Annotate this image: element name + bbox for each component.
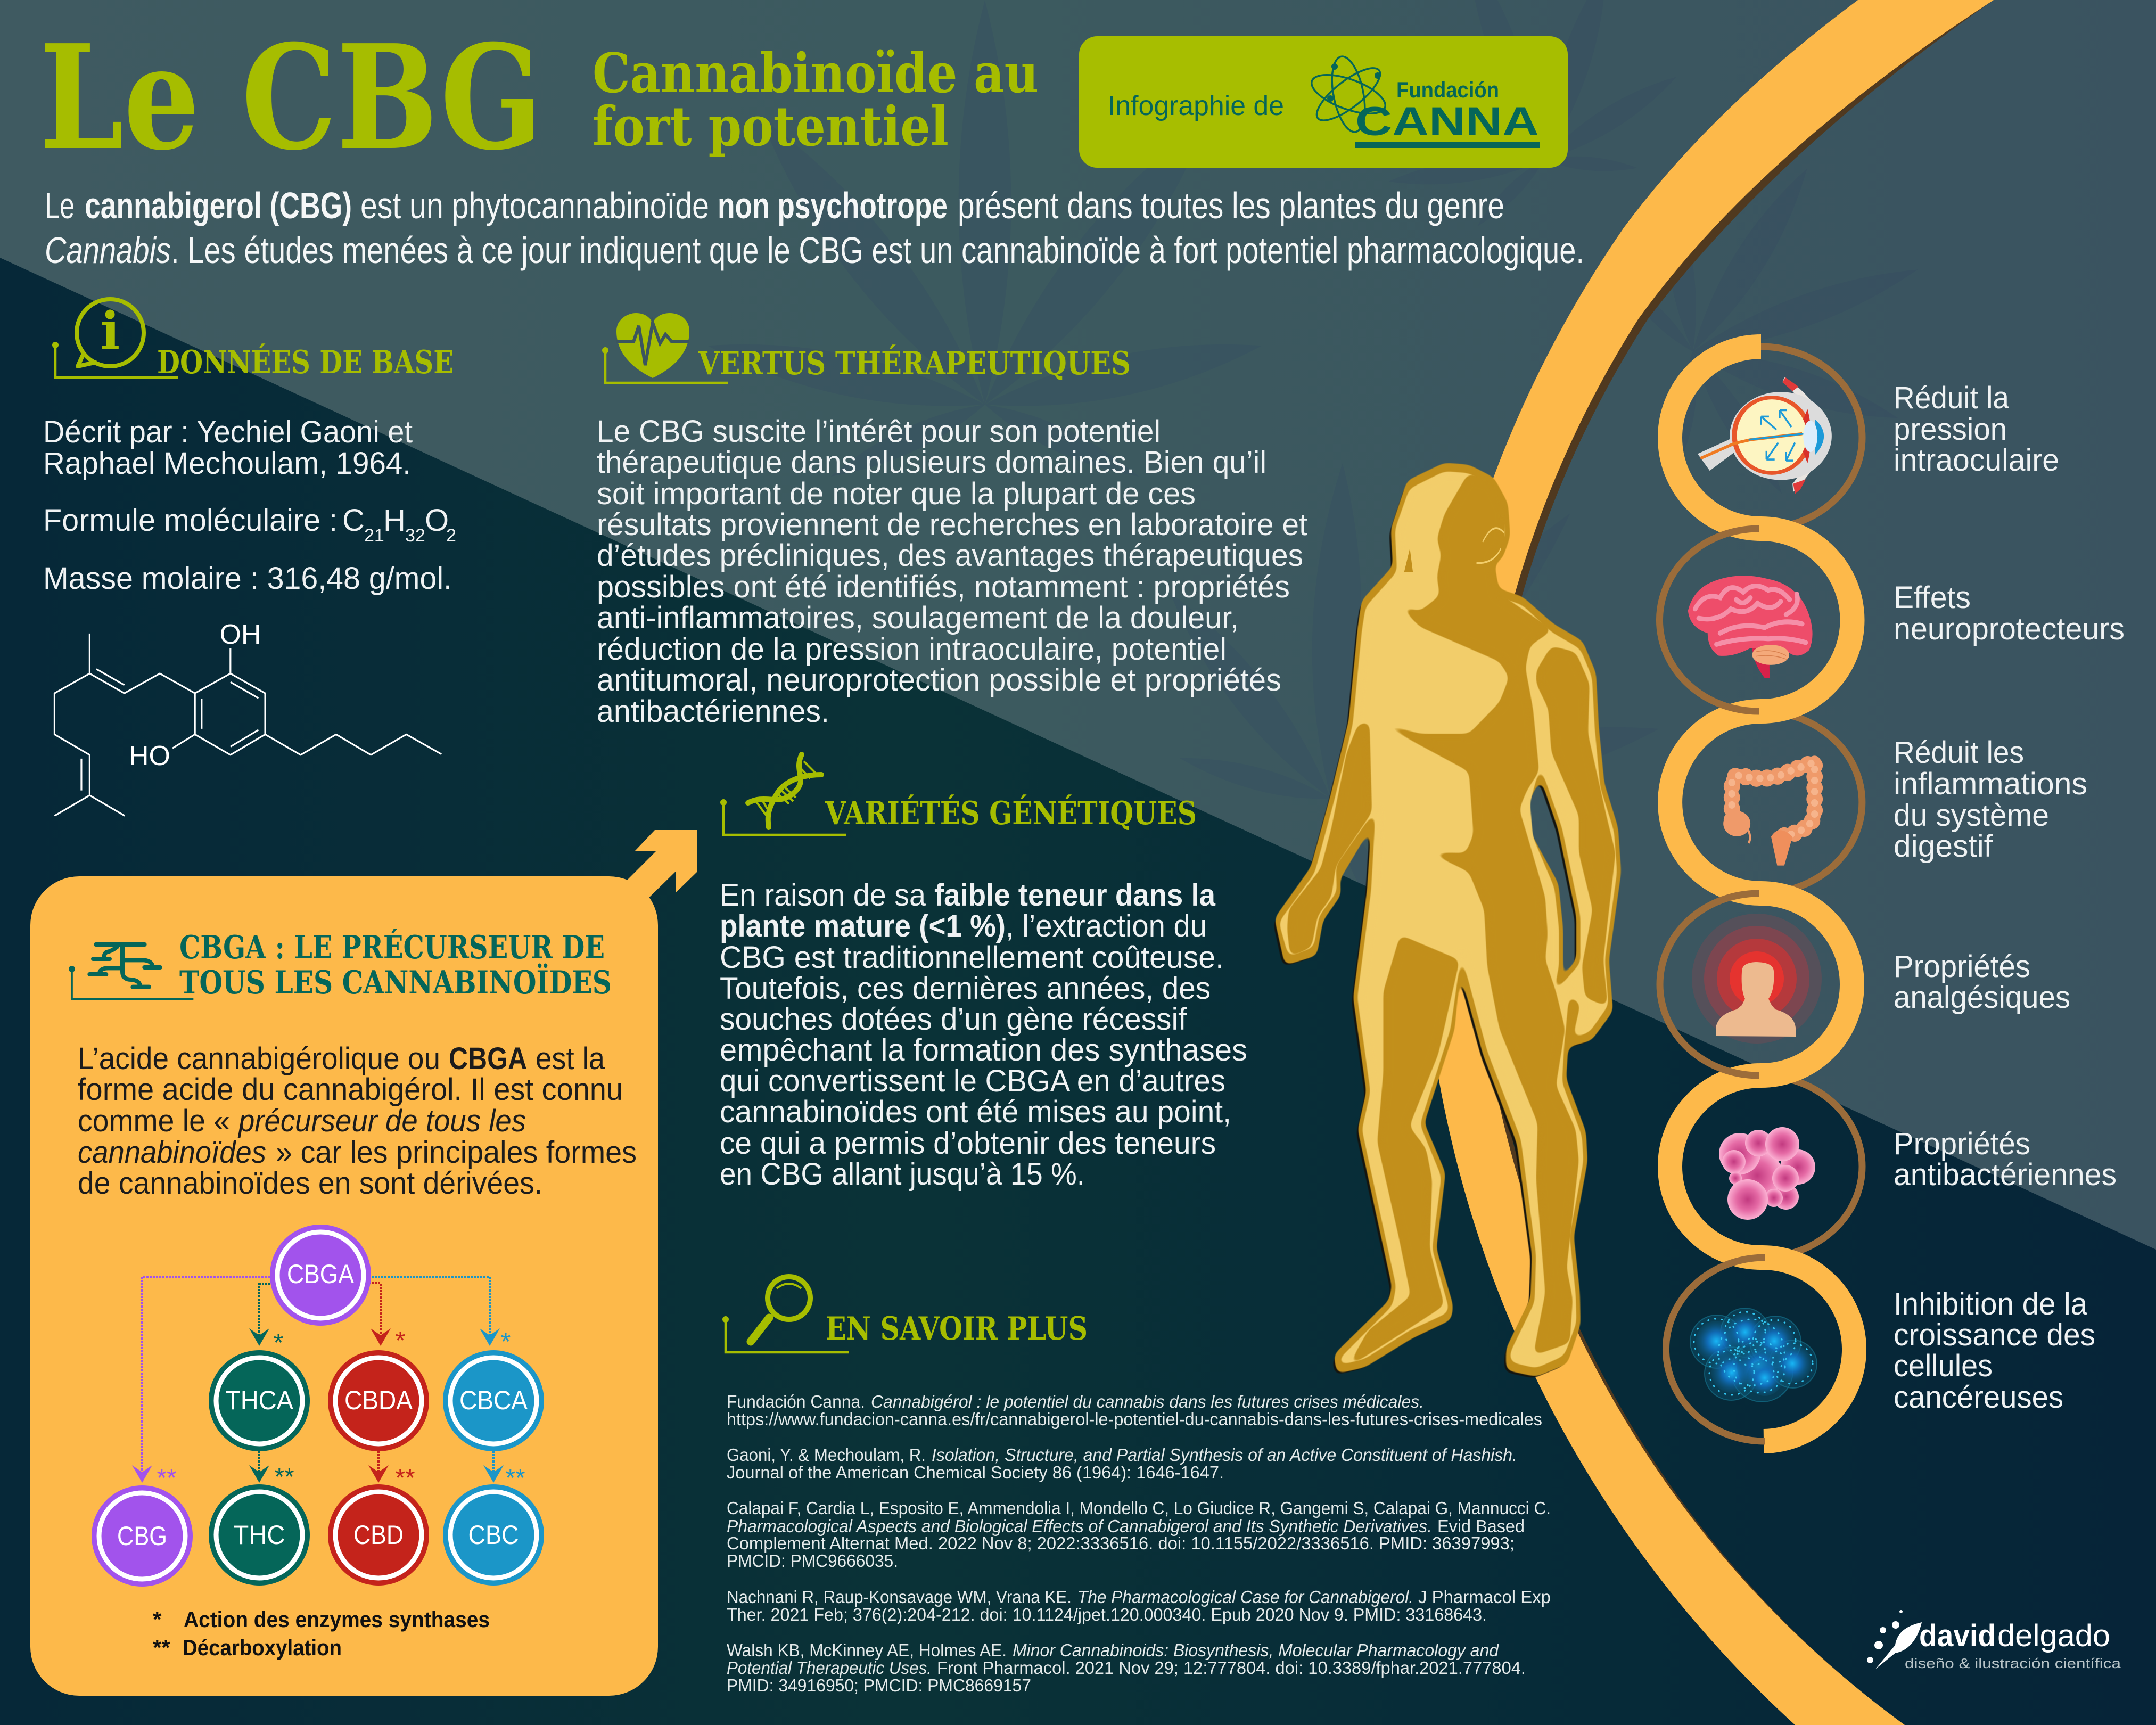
references: PMCID: PMC9666035.: [727, 1551, 898, 1571]
background cannabis leaves: [704, 0, 1975, 1024]
text: données de base: 2: [446, 525, 456, 546]
references: Gaoni, Y. & Mechoulam, R.: [727, 1445, 926, 1465]
text: variétés génétiques: plante mature (<1 %): [720, 909, 1006, 943]
heading: données de base: DONNÉES DE BASE: [157, 343, 454, 381]
text: variétés génétiques: [720, 878, 1247, 1192]
text: CBGA description: forme acide du cannabigérol. Il est connu: [78, 1072, 623, 1107]
references: J Pharmacol Exp: [1418, 1587, 1551, 1607]
icon: colon: [1723, 762, 1815, 866]
legend: **: [153, 1635, 170, 1660]
intro text: présent dans toutes les plantes du genre: [958, 185, 1504, 226]
heading: en savoir plus: EN SAVOIR PLUS: [826, 1310, 1088, 1348]
text: données de base: Décrit par : Yechiel Gaoni et: [43, 415, 413, 449]
title: Le CBG: [39, 13, 542, 182]
text: données de base: Masse molaire : 316,48 g/mol.: [43, 561, 452, 596]
references: Ther. 2021 Feb; 376(2):204-212. doi: 10.1124/jpet.120.000340. Epub 2020 Nov 9. PMID: 33168643.: [727, 1605, 1487, 1624]
molecule: CBG structure: OH: [219, 619, 261, 650]
logo box: Fundación Canna: [1079, 36, 1568, 168]
legend: Décarboxylation: [183, 1635, 342, 1660]
label: brain: neuroprotecteurs: [1894, 612, 2125, 646]
text: vertus thérapeutiques: Le CBG suscite l’intérêt pour son potentiel: [597, 414, 1161, 449]
heading: variétés génétiques: VARIÉTÉS GÉNÉTIQUES: [825, 794, 1197, 832]
text: données de base: Formule moléculaire :: [43, 503, 338, 538]
text: vertus thérapeutiques: antibactériennes.: [597, 694, 829, 729]
node: THC: [209, 1484, 310, 1586]
legend: *: [153, 1607, 162, 1632]
label: brain: [1894, 580, 2125, 646]
node: CBCA: CBCA: [459, 1385, 528, 1415]
label: colon: digestif: [1894, 829, 1993, 864]
references: Complement Alternat Med. 2022 Nov 8; 2022:3336516. doi: 10.1155/2022/3336516. PMID: 36397993;: [727, 1533, 1515, 1553]
diagram arrows: [142, 1277, 493, 1476]
label: colon: du système: [1894, 798, 2049, 833]
node: CBGA: CBGA: [287, 1259, 355, 1289]
icon: DNA: [720, 754, 846, 835]
logo box: Fundación Canna: Infographie de: [1108, 91, 1284, 121]
legend: Action des enzymes synthases: [184, 1607, 490, 1632]
icon: head with pain rings: [1692, 914, 1822, 1044]
label: cancer cells: cellules: [1894, 1349, 1993, 1383]
text: variétés génétiques: souches dotées d’un gène récessif: [720, 1002, 1187, 1037]
node: CBC: [443, 1484, 544, 1586]
asterisks: **: [157, 1464, 177, 1492]
references: Nachnani R, Raup-Konsavage WM, Vrana KE.: [727, 1587, 1072, 1607]
intro text: Le: [45, 185, 75, 226]
intro text: [45, 185, 1584, 271]
text: variétés génétiques: en CBG allant jusqu’à 15 %.: [720, 1157, 1085, 1192]
icon: info bubble: i: [101, 301, 120, 361]
references: Fundación Canna.: [727, 1392, 865, 1411]
text: variétés génétiques: , l’extraction du: [1006, 909, 1207, 943]
label: bacteria: Propriétés: [1894, 1127, 2030, 1161]
text: vertus thérapeutiques: d’études précliniques, des avantages thérapeutiques: [597, 538, 1303, 573]
text: vertus thérapeutiques: résultats proviennent de recherches en laboratoire et: [597, 507, 1307, 542]
intro text: est un phytocannabinoïde: [360, 185, 709, 226]
text: données de base: H: [383, 503, 406, 538]
asterisks: *: [274, 1329, 283, 1357]
references: https://www.fundacion-canna.es/fr/cannabigerol-le-potentiel-du-cannabis-dans-les-futures-crises-medicales: [727, 1409, 1542, 1429]
text: variétés génétiques: faible teneur dans la: [934, 878, 1216, 913]
node: CBDA: CBDA: [344, 1385, 413, 1415]
text: données de base: [43, 415, 456, 596]
icon: bacteria: [1719, 1127, 1815, 1220]
text: CBGA description: CBGA: [449, 1041, 527, 1076]
icon: heart ECG: [602, 313, 728, 383]
label: colon: [1894, 735, 2087, 864]
brown ring halves behind the gold: [1761, 347, 1862, 1258]
references: Calapai F, Cardia L, Esposito E, Ammendolia I, Mondello C, Lo Giudice R, Gangemi S, Calapai G, Mannucci C.: [727, 1498, 1551, 1518]
text: CBGA description: est la: [536, 1041, 605, 1076]
molecule: CBG structure: HO: [129, 741, 170, 771]
text: CBGA description: L’acide cannabigérolique ou: [78, 1041, 440, 1076]
node: CBG: CBG: [117, 1521, 167, 1551]
logo: David Delgado: [1867, 1610, 2121, 1671]
label: eye: intraoculaire: [1894, 443, 2059, 478]
node: THCA: [209, 1350, 310, 1451]
asterisks: **: [395, 1464, 415, 1492]
label: brain: Effets: [1894, 580, 1971, 615]
icon: cannabinoid tree: [69, 944, 193, 999]
text: CBGA description: cannabinoïdes: [78, 1135, 266, 1170]
body shading: right arm: [1536, 646, 1616, 1007]
text: vertus thérapeutiques: réduction de la pression intraoculaire, potentiel: [597, 632, 1227, 667]
references: Isolation, Structure, and Partial Synthesis of an Active Constituent of Hashish.: [932, 1445, 1517, 1465]
text: variétés génétiques: CBG est traditionnellement coûteuse.: [720, 940, 1224, 975]
text: données de base: 21: [364, 525, 384, 546]
asterisks: **: [505, 1464, 525, 1492]
node: THC: THC: [233, 1520, 285, 1550]
subtitle: [593, 42, 1039, 159]
logo box: Fundación Canna: Fundación: [1396, 77, 1499, 102]
icon: cancer cells: [1690, 1308, 1817, 1402]
text: données de base: O: [425, 503, 449, 538]
references: Pharmacological Aspects and Biological Effects of Cannabigerol and Its Synthetic Derivatives.: [727, 1516, 1432, 1536]
node: CBD: CBD: [353, 1520, 404, 1550]
legend: [153, 1607, 490, 1660]
big gold arc: [1421, 0, 1994, 1725]
human body figure: [1273, 465, 1620, 1378]
subtitle: Cannabinoïde au: [593, 42, 1039, 105]
heading: CBGA: [179, 929, 612, 1001]
text: variétés génétiques: Toutefois, ces dernières années, des: [720, 971, 1211, 1006]
node: CBC: CBC: [468, 1520, 519, 1550]
subtitle: fort potentiel: [593, 95, 949, 159]
node: CBCA: [443, 1350, 544, 1451]
body shading: left arm: [1287, 721, 1372, 957]
references: PMID: 34916950; PMCID: PMC8669157: [727, 1675, 1031, 1695]
molecule: CBG structure: [54, 619, 441, 816]
references: Potential Therapeutic Uses.: [727, 1658, 932, 1678]
text: vertus thérapeutiques: anti-inflammatoires, soulagement de la douleur,: [597, 601, 1239, 635]
label: head pain: analgésiques: [1894, 980, 2070, 1015]
icon: info bubble: [52, 299, 178, 377]
label: cancer cells: cancéreuses: [1894, 1380, 2063, 1415]
heading: CBGA: CBGA : LE PRÉCURSEUR DE: [179, 929, 605, 966]
gold helix: [1670, 347, 1854, 1441]
heading: vertus thérapeutiques: VERTUS THÉRAPEUTIQUES: [698, 344, 1131, 382]
logo: David Delgado: delgado: [1997, 1619, 2110, 1653]
label: head pain: [1894, 949, 2070, 1015]
text: vertus thérapeutiques: possibles ont été identifiés, notamment : propriétés: [597, 570, 1290, 604]
text: variétés génétiques: empêchant la formation des synthases: [720, 1033, 1247, 1067]
text: CBGA description: [78, 1041, 637, 1201]
icon: brain: [1688, 576, 1813, 678]
text: données de base: C: [342, 503, 365, 538]
intro text: . Les études menées à ce jour indiquent que le CBG est un cannabinoïde à fort potentiel pharmacologique.: [171, 229, 1584, 271]
references: [727, 1392, 1551, 1695]
references: The Pharmacological Case for Cannabigerol.: [1077, 1587, 1413, 1607]
label: cancer cells: Inhibition de la: [1894, 1287, 2088, 1321]
label: bacteria: [1894, 1127, 2117, 1192]
arrow: panel to genetic varieties: [586, 830, 697, 958]
label: eye: [1894, 381, 2059, 478]
node: CBD: [328, 1484, 429, 1586]
references: Front Pharmacol. 2021 Nov 29; 12:777804. doi: 10.3389/fphar.2021.777804.: [937, 1658, 1526, 1678]
references: Cannabigérol : le potentiel du cannabis dans les futures crises médicales.: [871, 1392, 1424, 1411]
text: variétés génétiques: qui convertissent le CBGA en d’autres: [720, 1064, 1225, 1098]
label: eye: pression: [1894, 412, 2007, 447]
text: CBGA description: comme le «: [78, 1104, 230, 1138]
references: Journal of the American Chemical Society 86 (1964): 1646-1647.: [727, 1463, 1224, 1482]
text: variétés génétiques: cannabinoïdes ont été mises au point,: [720, 1095, 1231, 1129]
arrowheads: [132, 1328, 504, 1483]
node: CBDA: [328, 1350, 429, 1451]
references: Evid Based: [1437, 1516, 1525, 1536]
logo: David Delgado: diseño & ilustración científica: [1905, 1655, 2121, 1671]
text: variétés génétiques: ce qui a permis d’obtenir des teneurs: [720, 1126, 1216, 1161]
logo: David Delgado: david: [1919, 1619, 1996, 1653]
asterisks: *: [396, 1327, 405, 1355]
label: head pain: Propriétés: [1894, 949, 2030, 984]
heading: CBGA: TOUS LES CANNABINOÏDES: [179, 963, 612, 1001]
intro text: non psychotrope: [718, 185, 948, 226]
label: eye: Réduit la: [1894, 381, 2010, 415]
text: vertus thérapeutiques: thérapeutique dans plusieurs domaines. Bien qu’il: [597, 445, 1266, 480]
references: Walsh KB, McKinney AE, Holmes AE.: [727, 1640, 1007, 1660]
text: vertus thérapeutiques: [597, 414, 1307, 729]
intro text: cannabigerol (CBG): [85, 185, 352, 226]
asterisks: **: [274, 1463, 294, 1491]
text: variétés génétiques: En raison de sa: [720, 878, 926, 913]
body shading: torso and head: [1370, 473, 1579, 1356]
references: Minor Cannabinoids: Biosynthesis, Molecular Pharmacology and: [1013, 1640, 1500, 1660]
intro text: Cannabis: [45, 229, 171, 271]
label: colon: Réduit les: [1894, 735, 2024, 770]
asterisks: [157, 1327, 525, 1492]
label: cancer cells: [1894, 1287, 2095, 1415]
node: THCA: THCA: [225, 1385, 294, 1415]
icon: magnifier: [722, 1277, 849, 1352]
asterisks: *: [501, 1328, 511, 1356]
logo box: Fundación Canna: CANNA: [1355, 99, 1539, 144]
text: données de base: 32: [405, 525, 425, 546]
text: CBGA description: précurseur de tous les: [237, 1104, 526, 1138]
brown ring halves over the gold: [1659, 529, 1765, 1441]
node: CBGA: [270, 1225, 371, 1326]
node: CBG: [92, 1485, 193, 1587]
body shading: left leg: [1347, 935, 1460, 1368]
text: vertus thérapeutiques: antitumoral, neuroprotection possible et propriétés: [597, 663, 1281, 697]
text: CBGA description: » car les principales formes: [276, 1135, 637, 1170]
label: colon: inflammations: [1894, 767, 2087, 801]
text: vertus thérapeutiques: soit important de noter que la plupart de ces: [597, 477, 1196, 511]
text: données de base: Raphael Mechoulam, 1964.: [43, 446, 411, 481]
label: cancer cells: croissance des: [1894, 1318, 2095, 1352]
panel: CBGA: [30, 830, 697, 1696]
text: CBGA description: de cannabinoïdes en sont dérivées.: [78, 1166, 542, 1201]
label: bacteria: antibactériennes: [1894, 1157, 2117, 1192]
icon: eye: [1698, 377, 1832, 494]
